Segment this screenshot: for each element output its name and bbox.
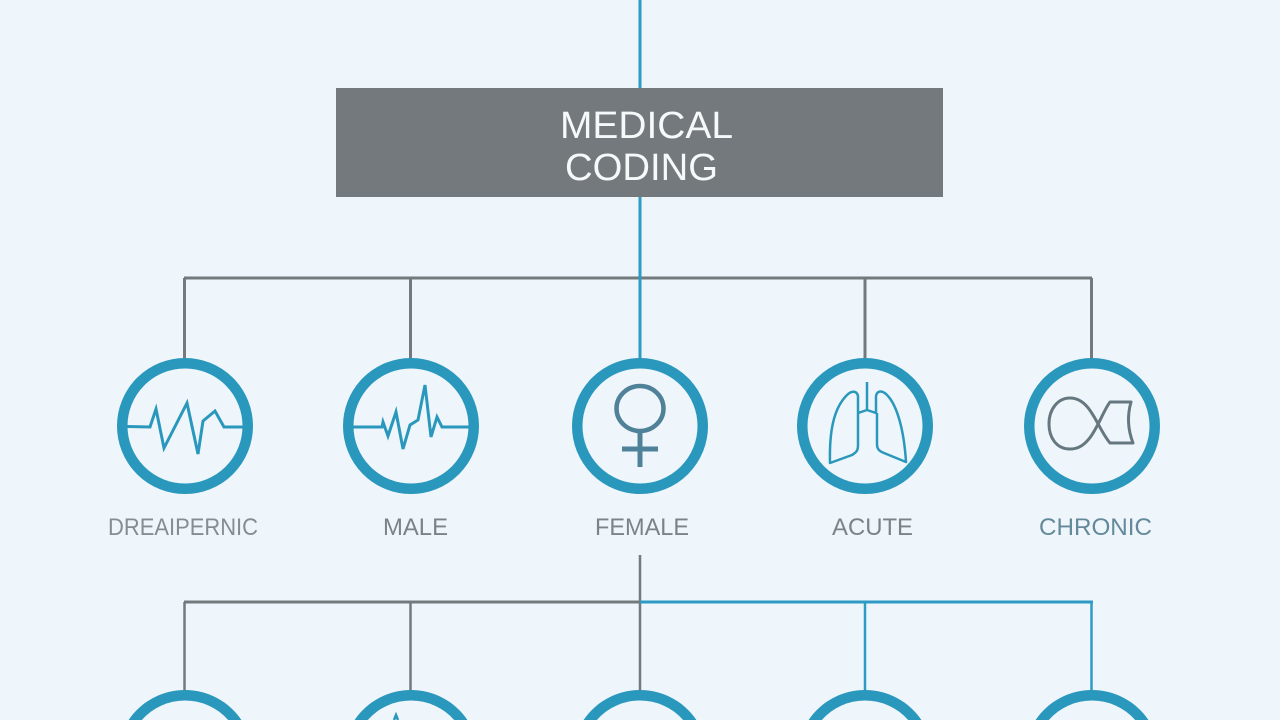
label: male: MALE [383, 514, 448, 541]
icon: lungs circle [802, 363, 928, 489]
icon: lower circle two [355, 690, 467, 720]
connector: lower tree to second row [184, 555, 1093, 692]
icon: female symbol circle [577, 363, 703, 489]
label: acute: ACUTE [832, 514, 913, 541]
icon: lower circle four [809, 690, 921, 720]
label: female: FEMALE [595, 514, 689, 541]
title box: medical coding: CODING [565, 147, 718, 189]
icon: lower circle one [129, 690, 241, 720]
icon: chronic loop circle [1029, 363, 1155, 489]
label: dreaipernic: DREAIPERNIC [108, 514, 258, 541]
icon: heartbeat circle one [122, 363, 248, 489]
connector: top line into title box [638, 0, 642, 88]
label: chronic: CHRONIC [1039, 514, 1152, 541]
icon: heartbeat circle two [348, 363, 474, 489]
connector: upper tree from title to first row [184, 197, 1092, 359]
title box: medical coding: MEDICAL [560, 105, 733, 147]
icon: lower circle three [584, 690, 696, 720]
title box: medical coding [336, 88, 943, 197]
icon: lower circle five [1036, 690, 1148, 720]
